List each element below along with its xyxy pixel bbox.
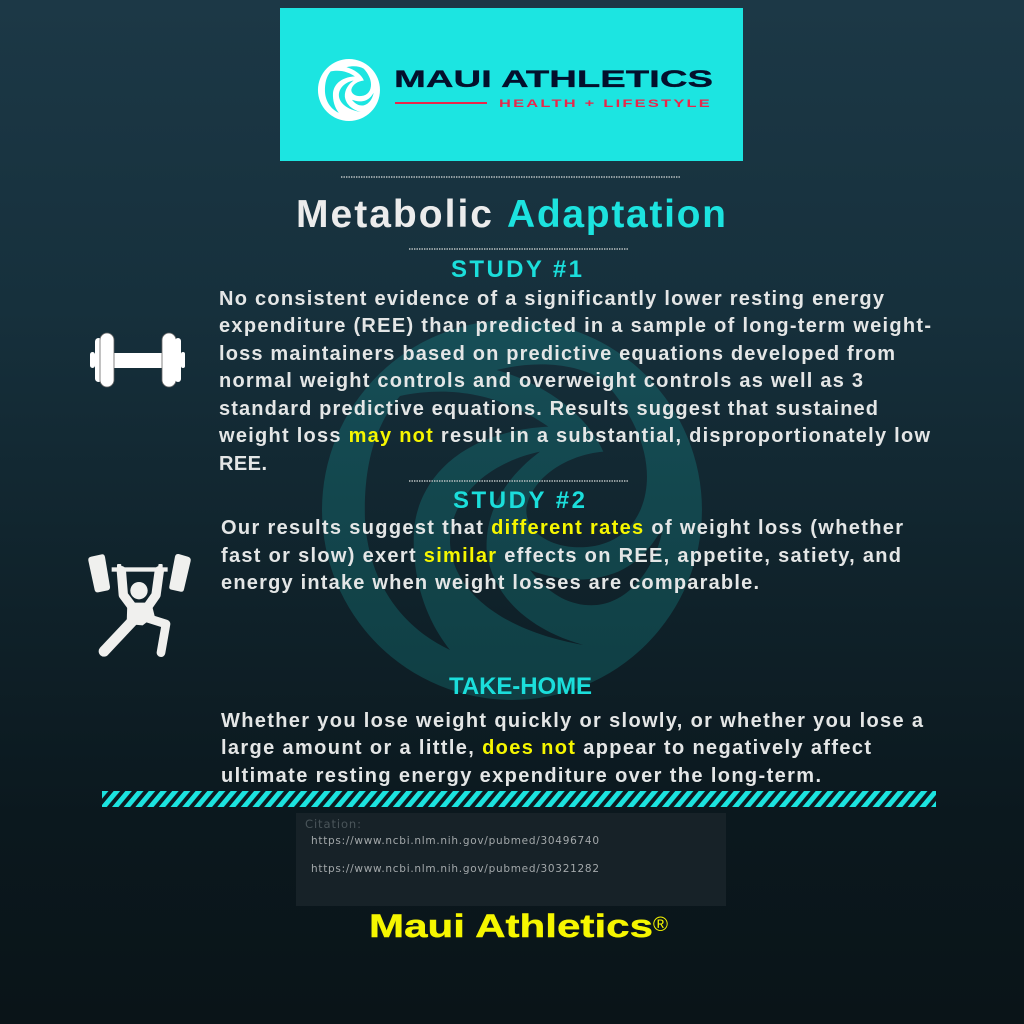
icon: wave logo (318, 59, 380, 121)
text: study 1 body: No consistent evidence of a significantly lower resting energy (219, 288, 885, 310)
title (296, 193, 726, 236)
title: Metabolic (296, 193, 492, 236)
text: take-home body (221, 710, 924, 787)
text: study 1 body: normal weight controls and overweight controls as well as 3 (219, 370, 863, 392)
text: study 1 body: loss maintainers based on predictive equations developed from (219, 343, 895, 365)
text: study 1 body: REE. (219, 453, 267, 475)
footer brand: Maui Athletics (369, 908, 653, 944)
text: take-home body: Whether you lose weight quickly or slowly, or whether you lose a (221, 710, 924, 732)
citation box (296, 813, 726, 906)
text: study 1 body: weight loss may not result in a substantial, disproportionately low (218, 425, 930, 447)
text: study 2 body (221, 517, 903, 594)
text: study 1 body (218, 288, 931, 475)
heading: study 1: STUDY #1 (451, 256, 582, 283)
title: Adaptation (507, 193, 726, 236)
text: study 2 body: fast or slow) exert similar effects on REE, appetite, satiety, and (221, 545, 901, 567)
text: take-home body: large amount or a little, does not appear to negatively affect (221, 737, 871, 759)
text: study 1 body: standard predictive equations. Results suggest that sustained (219, 398, 878, 420)
text: study 1 body: expenditure (REE) than predicted in a sample of long-term weight- (219, 315, 931, 337)
striped divider (102, 791, 936, 807)
heading: study 2: STUDY #2 (453, 487, 585, 514)
logo rule (395, 102, 487, 104)
heading: take-home: TAKE-HOME (449, 673, 592, 700)
citation link 1: https://www.ncbi.nlm.nih.gov/pubmed/30496740 (311, 835, 599, 847)
logo banner (280, 8, 743, 161)
footer brand: ® (653, 914, 668, 936)
text: take-home body: ultimate resting energy expenditure over the long-term. (221, 765, 821, 787)
icon: dumbbell (90, 333, 185, 387)
watermark logo (322, 320, 702, 700)
text: study 2 body: energy intake when weight losses are comparable. (221, 572, 759, 594)
text: study 2 body: Our results suggest that different rates of weight loss (whether (221, 517, 903, 539)
citation link 2: https://www.ncbi.nlm.nih.gov/pubmed/30321282 (311, 863, 599, 875)
icon: weightlifter (88, 554, 191, 653)
logo tagline: HEALTH + LIFESTYLE (499, 98, 712, 110)
citation label: Citation: (305, 817, 361, 831)
logo wordmark: MAUI ATHLETICS (394, 66, 713, 93)
